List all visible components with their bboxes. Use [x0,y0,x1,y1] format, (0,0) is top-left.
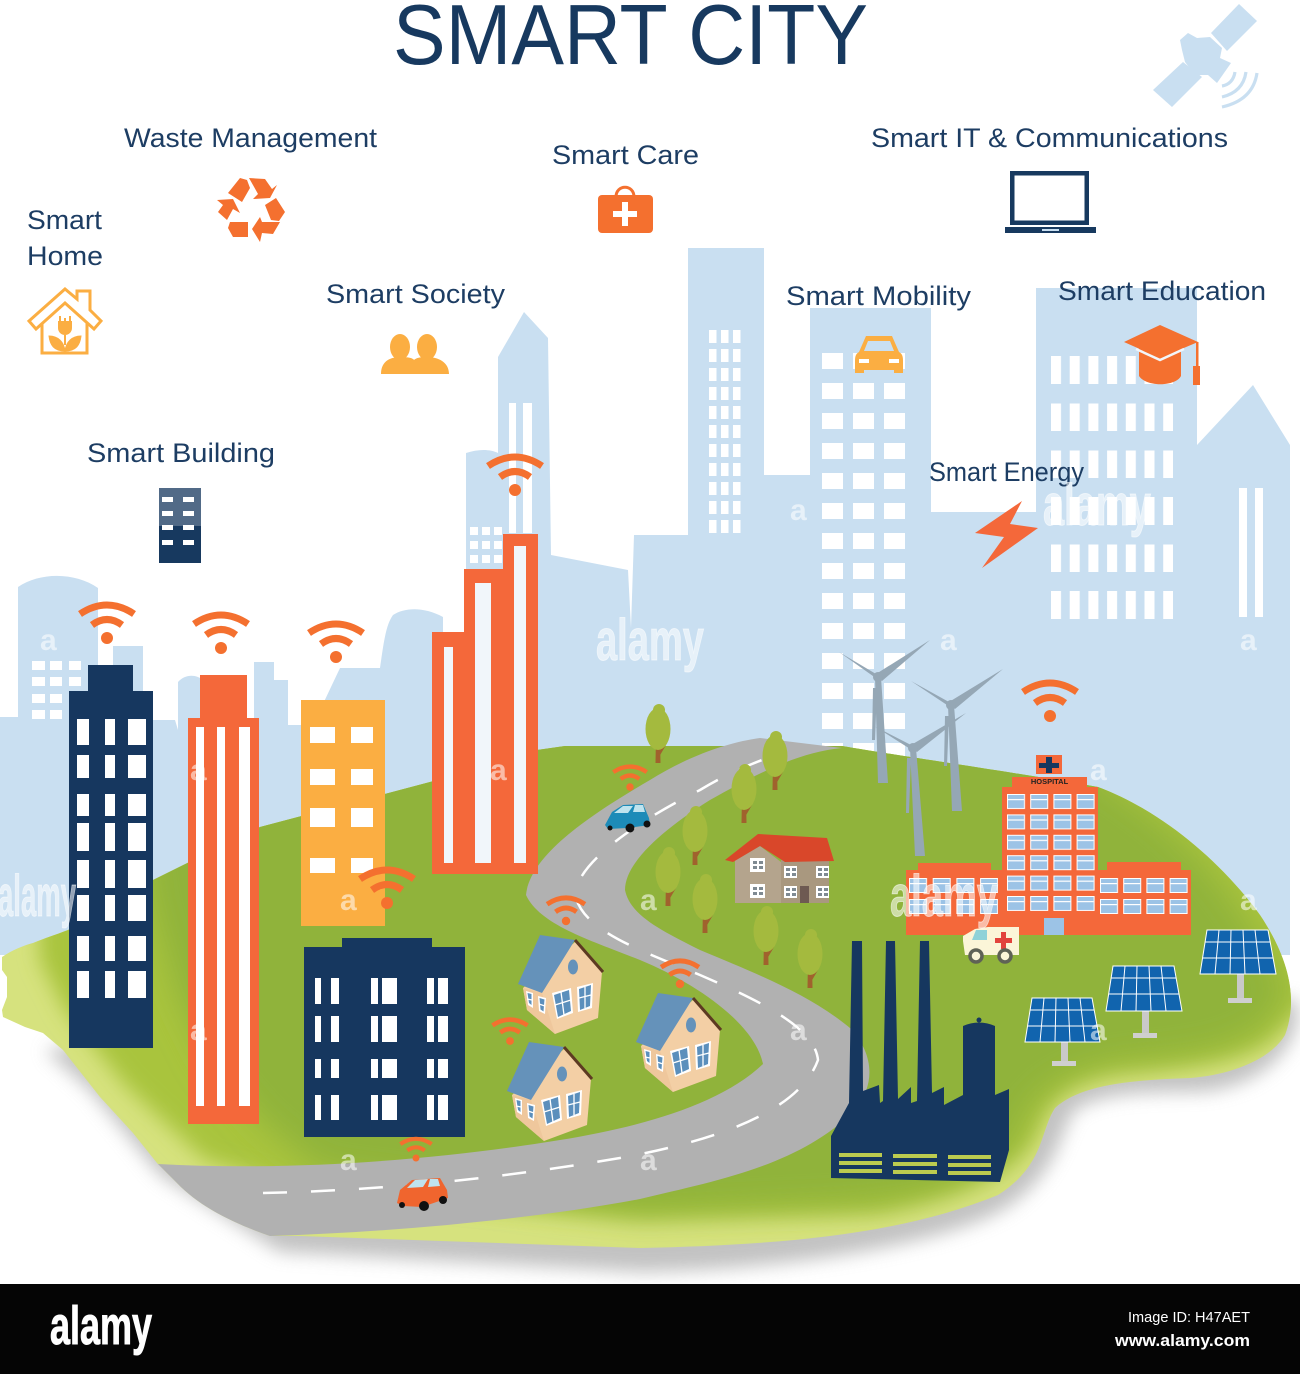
skyline windows: spire [470,403,532,563]
watermarks: a [1240,884,1257,917]
label: smart home: Home [27,241,103,271]
ambulance [963,927,1019,962]
footer url: www.alamy.com [1114,1331,1250,1350]
red-roof house [725,834,834,903]
blue car [605,804,650,832]
watermarks: a [1240,624,1257,657]
watermarks: a [940,624,957,657]
icon: building [159,488,201,563]
label: smart society: Smart Society [326,279,506,309]
icon: recycle [217,178,285,242]
icon: first aid case [598,187,653,233]
wifi signals on towers [80,457,1077,909]
label: smart home: Smart [27,205,103,235]
label: smart IT and communications: Smart IT & Communications [871,123,1228,153]
icon: lightning bolt [975,501,1038,568]
footer image id: Image ID: H47AET [1128,1309,1250,1326]
hospital: HOSPITAL [1031,777,1069,786]
watermarks: a [1090,754,1107,787]
wind turbines [839,640,1003,856]
yellow tower [301,700,385,926]
watermarks: a [490,754,507,787]
watermarks: a [190,1014,207,1047]
skyline windows: left cluster [32,661,81,719]
watermarks: a [1090,1014,1107,1047]
watermarks: a [190,754,207,787]
solar panels [1025,930,1276,1066]
icon: graduation cap [1124,325,1200,385]
footer logo: alamy [50,1296,152,1356]
skyline windows: tower C [1051,356,1173,621]
label: smart care: Smart Care [552,140,699,170]
label: smart building: Smart Building [87,438,275,468]
skyline windows: tower B [822,353,906,758]
watermarks: a [340,884,357,917]
hospital [906,755,1191,935]
icon: people [381,334,449,374]
island shadow [45,1000,1298,1272]
watermarks: a [340,1144,357,1177]
suburban houses [507,935,721,1141]
orange car [397,1178,448,1211]
watermarks: a [40,624,57,657]
label: smart mobility: Smart Mobility [786,281,972,311]
label: waste management: Waste Management [124,123,378,153]
watermarks: a [790,494,807,527]
watermarks: a [790,1014,807,1047]
label: smart education: Smart Education [1058,276,1266,306]
watermarks: alamy [890,864,998,929]
road [158,738,869,1236]
icon: satellite [1153,4,1257,107]
watermarks: alamy [0,864,76,929]
label: smart energy: Smart Energy [929,457,1084,487]
background skyline [0,248,1290,955]
icon: car front [855,336,903,373]
watermarks: alamy [596,608,704,673]
icon: laptop [1005,171,1096,233]
watermarks: a [640,1144,657,1177]
small wifi signals [400,767,699,1161]
factory [831,941,1009,1182]
island ground [2,746,1291,1248]
orange stepped tower [432,534,538,874]
label: smart home [27,205,103,271]
orange striped tower [188,675,259,1124]
footer bar [0,1284,1300,1374]
tall navy tower [69,665,153,1048]
skyline windows: tower A [709,330,741,534]
watermarks: alamy [1043,473,1151,538]
skyline windows: tower D [1239,488,1263,617]
trees [646,704,822,988]
watermarks [0,473,1257,1177]
wide navy building [304,938,465,1137]
watermarks: a [640,884,657,917]
icon: smart home [29,289,101,353]
